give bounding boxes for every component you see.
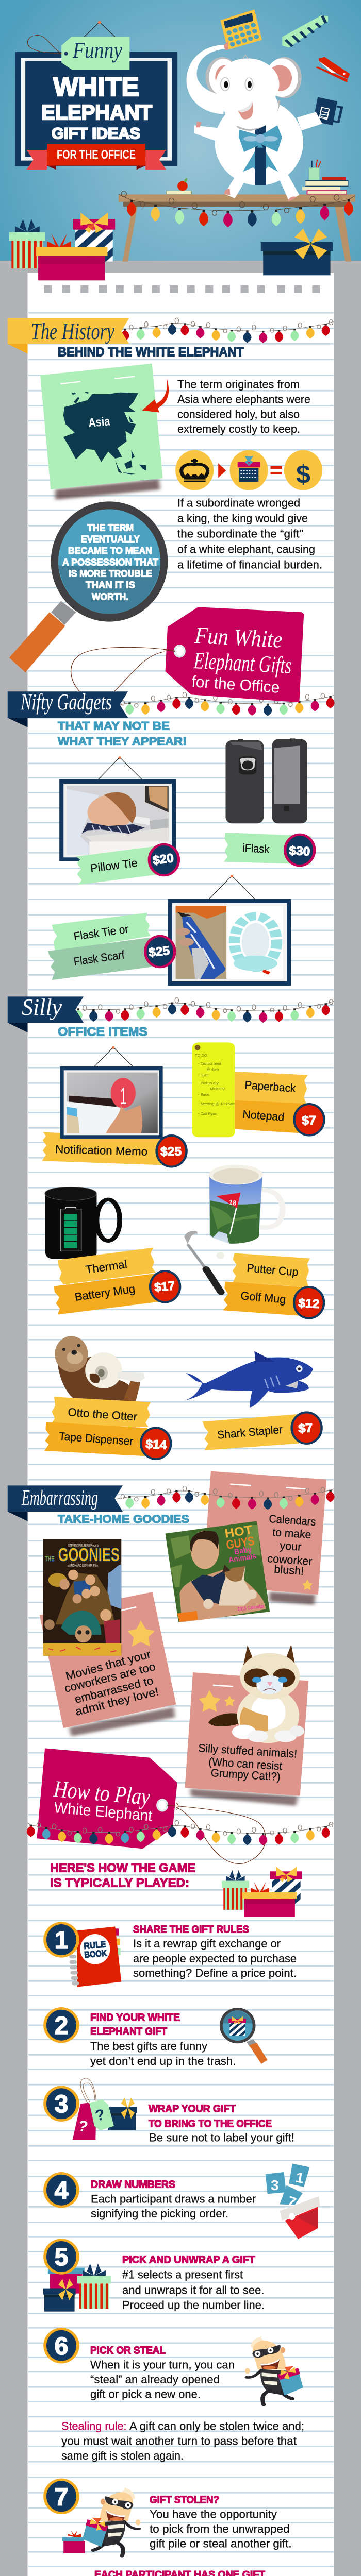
text: term origin: Asia where elephants were	[177, 393, 310, 405]
product photo: iFlask	[225, 738, 307, 823]
badge: 4: 4	[55, 2177, 69, 2205]
icon: tags and gift	[73, 2078, 137, 2140]
badge: 3: 3	[55, 2091, 68, 2118]
label: Thermal Battery Mug price	[54, 1248, 181, 1315]
label: Notification Memo price: $25	[160, 1145, 182, 1159]
label: Shark Stapler price: Shark Stapler	[217, 1423, 283, 1442]
gift tag: Fun White Elephant Gifts: Fun White	[194, 622, 283, 653]
calendar photo: 2015 Calendar	[237, 1604, 265, 1613]
step 3	[43, 2078, 294, 2144]
product photo: Shark Stapler	[184, 1351, 313, 1408]
gift tag: How to Play White Elephant: How to Play	[52, 1775, 151, 1810]
title: Funny: Funny	[72, 38, 122, 63]
label: Thermal Battery Mug price: Battery Mug	[74, 1282, 136, 1303]
text: stealing rule: same gift is stolen again.	[61, 2449, 184, 2462]
text: subordinate story: a lifetime of financial burden.	[177, 558, 322, 571]
magnifier callout: THAN IT IS	[86, 580, 135, 590]
icon: tags and gift: ?	[94, 2106, 106, 2125]
product photo: Flask Tie and Scarf	[168, 875, 291, 986]
notebook paper	[28, 273, 334, 2576]
text: gift stolen: to pick from the unwrapped	[150, 2522, 290, 2535]
text: pick and unwrap	[122, 2255, 265, 2312]
text: pick or steal: When it is your turn, you can	[90, 2358, 235, 2371]
label: Shark Stapler price: $7	[298, 1421, 313, 1436]
section banner: Nifty Gadgets: Nifty Gadgets	[20, 689, 112, 715]
label: Putter Cup Golf Mug price: Putter Cup	[247, 1261, 299, 1279]
gift tag: Fun White Elephant Gifts: Elephant Gifts	[193, 647, 292, 679]
product photo: Pillow Tie	[59, 756, 176, 861]
text: share the gift rules: are people expected to purchase	[133, 1952, 297, 1965]
desk items: apple, books and pencil cup	[166, 160, 348, 194]
calendar photo: GUYS	[225, 1534, 255, 1552]
pink note: calendars	[203, 1471, 326, 1605]
text: share the gift rules: something? Define a price point.	[133, 1967, 297, 1979]
badge: 2	[43, 2007, 79, 2043]
icon: magnifier with gift	[220, 2008, 268, 2064]
equation icons: king + gift = money	[175, 450, 322, 490]
text: term origin: considered holy, but also	[177, 408, 300, 421]
text: pick or steal: “steal” an already opened	[90, 2373, 220, 2386]
label: iFlask price	[224, 833, 316, 867]
badge: 7: 7	[55, 2484, 68, 2511]
heading: how the game is played: IS TYPICALLY PLAYED:	[50, 1876, 189, 1890]
icon: tags and gift: ?	[77, 2117, 89, 2136]
note card: Asia map	[40, 364, 163, 500]
icon: rule book	[69, 1926, 121, 1987]
flying props: calculator, tie, stapler, mug	[220, 9, 350, 125]
text: pick and unwrap: #1 selects a present first	[122, 2268, 243, 2281]
pink note: calendars: blush!	[274, 1563, 304, 1578]
label: Pillow Tie price	[76, 843, 180, 885]
heading: Behind the White Elephant: BEHIND THE WHITE ELEPHANT	[58, 345, 244, 360]
elephant mascot	[187, 41, 322, 201]
product photo: Paperback Notepad: - Call Ryan	[198, 1111, 217, 1116]
magnifier callout: THE TERM	[87, 523, 134, 533]
icon: gift pile	[43, 2264, 111, 2312]
product photo: Paperback Notepad: TO DO:	[195, 1053, 208, 1058]
calendar photo: HOT	[224, 1523, 254, 1541]
heading: that may not be what they appear	[58, 720, 187, 748]
label: Flask Tie or Flask Scarf price: Flask Tie or	[73, 922, 129, 943]
heading: take-home goodies: TAKE-HOME GOODIES	[58, 1513, 189, 1526]
text: subordinate story: a king, the king would give	[177, 512, 308, 524]
label: Paperback Notepad price: Notepad	[242, 1108, 285, 1124]
gift tag: Fun White Elephant Gifts	[71, 607, 304, 702]
heading: how the game is played	[50, 1861, 195, 1890]
text: gift stolen: You have the opportunity	[150, 2507, 277, 2520]
title: For the Office: FOR THE OFFICE	[57, 148, 136, 162]
label: Putter Cup Golf Mug price	[223, 1253, 325, 1319]
text: subordinate story	[177, 496, 322, 571]
badge: 5: 5	[55, 2244, 68, 2271]
heading: how the game is played: HERE'S HOW THE GAME	[50, 1861, 195, 1875]
text: pick or steal	[90, 2345, 235, 2400]
badge: 5	[43, 2239, 79, 2275]
calendar photo: Animals	[228, 1552, 257, 1565]
product photo: Paperback Notepad: @ 4pm	[206, 1067, 219, 1072]
label: Thermal Battery Mug price: $17	[154, 1279, 175, 1295]
pink note: movies	[40, 1592, 176, 1736]
badge: 1	[43, 1922, 79, 1958]
text: pick and unwrap: Proceed up the number line.	[122, 2299, 265, 2312]
label: Otto the Otter Tape Dispenser price: Tape Dispenser	[59, 1430, 134, 1448]
label: Paperback Notepad price	[235, 1072, 325, 1137]
text: wrap your gift: Be sure not to label your gift!	[149, 2131, 294, 2144]
icon: rule book: BOOK	[84, 1948, 108, 1960]
text: pick and unwrap: PICK AND UNWRAP A GIFT	[122, 2255, 255, 2266]
text: stealing rule: Stealing rule:	[61, 2420, 127, 2433]
magnifier callout: IS MORE TROUBLE	[69, 568, 152, 579]
text: share the gift rules: Is it a rewrap gift exchange or	[133, 1937, 281, 1950]
movie poster: The Goonies: STEVEN SPIELBERG Presents	[68, 1544, 99, 1548]
product photo: Notification Memo	[60, 1046, 163, 1139]
calendar photo	[166, 1521, 270, 1622]
background: top blue header	[0, 0, 361, 261]
step 5	[43, 2239, 265, 2312]
label: Notification Memo price	[42, 1132, 188, 1168]
magnifier callout: WORTH.	[92, 591, 128, 602]
label: iFlask price: $30	[289, 844, 310, 859]
product photo: Paperback Notepad: - Bank	[198, 1092, 210, 1097]
pink note: calendars: coworker	[267, 1552, 313, 1568]
text: draw numbers: signifying the picking order.	[91, 2207, 228, 2220]
text: wrap your gift: TO BRING TO THE OFFICE	[149, 2118, 272, 2129]
product photo: Otto the Otter	[55, 1336, 145, 1401]
text: term origin	[177, 378, 310, 435]
step 6	[43, 2328, 303, 2405]
product photo: Thermal Battery Mug	[45, 1187, 120, 1259]
magnifier callout: A POSSESSION THAT	[62, 557, 158, 567]
text: find your white elephant gift: yet don’t end up in the trash.	[90, 2055, 236, 2067]
icon: numbers in santa hat	[266, 2163, 320, 2239]
heading: office items: OFFICE ITEMS	[58, 1025, 147, 1039]
text: find your white elephant gift	[90, 2012, 236, 2067]
gift pile: top left	[9, 213, 115, 280]
text: term origin: The term originates from	[177, 378, 300, 391]
desk with lights	[119, 191, 355, 262]
text: stealing rule: you must wait another turn to pass before that	[61, 2435, 297, 2448]
note card: Asia map: Asia	[88, 414, 111, 430]
text: stealing rule	[61, 2420, 304, 2462]
product photo: Paperback Notepad: cleaning	[210, 1086, 225, 1091]
magnifier callout: EVENTUALLY	[81, 534, 140, 545]
pink note: stuffed animals: Silly stuffed animals!	[198, 1741, 298, 1760]
text: draw numbers	[91, 2179, 256, 2220]
light string: nifty gadgets	[115, 692, 335, 716]
section banner: The History: The History	[31, 318, 114, 344]
movie poster: The Goonies: THE GOONIES	[45, 1544, 120, 1565]
title: White: WHITE	[53, 72, 139, 102]
magnifier callout: BECAME TO MEAN	[68, 546, 152, 556]
label: Notification Memo price: Notification Memo	[55, 1143, 147, 1158]
gift: navy box on right	[261, 229, 333, 275]
text: pick and unwrap: and unwraps it for all to see.	[122, 2283, 264, 2296]
pink note: stuffed animals	[185, 1672, 308, 1806]
gift tag: Fun White Elephant Gifts: for the Office	[191, 672, 281, 697]
title: Gift Ideas: GIFT IDEAS	[52, 125, 140, 142]
label: Otto the Otter Tape Dispenser price: $14	[145, 1437, 168, 1452]
label: Otto the Otter Tape Dispenser price: Otto the Otter	[68, 1405, 138, 1423]
badge: 2: 2	[55, 2012, 68, 2040]
light string: how to play	[27, 1820, 334, 1845]
pink note: movies: coworkers are too	[63, 1660, 157, 1695]
section banner: Embarrassing	[8, 1485, 123, 1521]
icon: numbers in santa hat: 1	[294, 2169, 305, 2187]
section banner: Silly	[8, 994, 84, 1032]
text: draw numbers: DRAW NUMBERS	[91, 2179, 175, 2191]
badge: 1: 1	[55, 1927, 68, 1954]
pink note: movies: Movies that your	[64, 1648, 152, 1683]
product photo: Paperback Notepad: - Pickup dry	[198, 1081, 219, 1086]
section banner: Silly: Silly	[22, 994, 62, 1020]
heading: that may not be what they appear: THAT MAY NOT BE	[58, 720, 170, 733]
paper punch holes	[44, 285, 320, 293]
step 1	[43, 1922, 297, 1987]
step 7	[43, 2479, 292, 2556]
label: Pillow Tie price: $20	[152, 851, 174, 868]
product photo: Paperback Notepad: - Dentist appt	[198, 1061, 222, 1066]
badge: 6: 6	[55, 2333, 68, 2360]
text: wrap your gift: WRAP YOUR GIFT	[149, 2103, 236, 2114]
badge: 6	[43, 2328, 79, 2363]
label: Paperback Notepad price: Paperback	[244, 1078, 297, 1095]
gift tag: How to Play White Elephant: White Elephant	[53, 1799, 153, 1825]
icon: burglar with gift	[62, 2487, 141, 2556]
step 4	[43, 2163, 320, 2239]
text: stealing rule: A gift can only be stolen twice and;	[129, 2420, 304, 2433]
label: Flask Tie or Flask Scarf price	[48, 913, 176, 980]
text: subordinate story: of a white elephant, causing	[177, 543, 315, 555]
icon: numbers in santa hat: 7	[285, 2193, 298, 2211]
label: Putter Cup Golf Mug price: Golf Mug	[240, 1289, 286, 1306]
product photo: Paperback Notepad: - Meeting @ 10:15am	[198, 1101, 235, 1106]
text: find your white elephant gift: The best gifts are funny	[90, 2040, 207, 2053]
magnifier callout	[9, 501, 168, 672]
label: Otto the Otter Tape Dispenser price	[44, 1397, 172, 1460]
badge: 7	[43, 2479, 79, 2514]
icon: rule book: RULE	[84, 1939, 106, 1951]
pink note: movies: embarrassed to	[73, 1674, 155, 1706]
step 2	[43, 2007, 268, 2067]
text: gift stolen: GIFT STOLEN?	[150, 2494, 219, 2505]
gift pile: how to play	[222, 1867, 302, 1917]
title: Elephant: ELEPHANT	[41, 100, 152, 124]
text: gift stolen: gift pile or steal another gift.	[150, 2537, 292, 2550]
section banner: Nifty Gadgets	[8, 689, 128, 727]
product photo: Putter Cup Golf Mug: 18	[228, 1198, 237, 1207]
plush: Grumpy Cat	[208, 1645, 304, 1743]
text: subordinate story: If a subordinate wronged	[177, 496, 300, 509]
light string: embarrassing section	[115, 1486, 335, 1510]
pink note: calendars: Calendars	[269, 1512, 316, 1528]
label: Shark Stapler price	[203, 1411, 323, 1450]
text: share the gift rules	[133, 1924, 297, 1979]
pink note: calendars: to make	[272, 1526, 311, 1541]
label: Flask Tie or Flask Scarf price: Flask Scarf	[73, 948, 126, 968]
text: subordinate story: the subordinate the “gift”	[177, 527, 303, 540]
label: Putter Cup Golf Mug price: $12	[298, 1296, 320, 1311]
label: Flask Tie or Flask Scarf price: $25	[148, 944, 170, 960]
label: Paperback Notepad price: $7	[302, 1114, 316, 1128]
arrow: red curved	[142, 379, 169, 413]
label: Pillow Tie price: Pillow Tie	[90, 856, 138, 875]
title sign	[15, 21, 177, 170]
equation icons: king + gift = money: $	[296, 460, 310, 489]
text: pick or steal: gift or pick a new one.	[90, 2387, 201, 2400]
label: Thermal Battery Mug price: Thermal	[85, 1258, 128, 1276]
badge: 3	[43, 2086, 79, 2122]
heading: that may not be what they appear: WHAT THEY APPEAR!	[58, 735, 187, 748]
pink note: stuffed animals: (Who can resist	[208, 1755, 283, 1772]
text: term origin: extremely costly to keep.	[177, 422, 300, 435]
product photo: Putter Cup Golf Mug	[184, 1165, 283, 1292]
section banner: The History	[8, 318, 129, 354]
calendar photo: Baby	[234, 1545, 253, 1556]
pink note: calendars: your	[280, 1539, 302, 1553]
text: find your white elephant gift: FIND YOUR WHITE	[90, 2012, 180, 2024]
light string: silly section	[28, 998, 334, 1023]
text: gift stolen	[150, 2494, 292, 2550]
gift tag: How to Play White Elephant	[37, 1748, 266, 1863]
movie poster: The Goonies: A RICHARD DONNER Film	[68, 1564, 98, 1568]
movie poster: The Goonies	[43, 1539, 121, 1656]
icon: numbers in santa hat: 3	[271, 2177, 279, 2193]
badge: 4	[43, 2172, 79, 2208]
text: find your white elephant gift: ELEPHANT GIFT	[90, 2026, 167, 2037]
section banner: Embarrassing: Embarrassing	[21, 1486, 98, 1510]
text: pick or steal: PICK OR STEAL	[90, 2345, 166, 2356]
pink note: stuffed animals: Grumpy Cat!?)	[210, 1766, 281, 1783]
label: iFlask price: iFlask	[242, 841, 270, 856]
product photo: Notification Memo: 1	[120, 1082, 127, 1109]
light string: history section	[28, 318, 334, 343]
pink note: movies: admit they love!	[74, 1685, 160, 1718]
icon: burglar	[245, 2336, 303, 2405]
text: draw numbers: Each participant draws a number	[91, 2193, 256, 2206]
product photo: Paperback Notepad: - Gym	[198, 1073, 208, 1077]
text: share the gift rules: SHARE THE GIFT RULES	[133, 1924, 249, 1936]
text: wrap your gift	[149, 2103, 294, 2144]
product photo: Paperback Notepad	[192, 1042, 235, 1137]
